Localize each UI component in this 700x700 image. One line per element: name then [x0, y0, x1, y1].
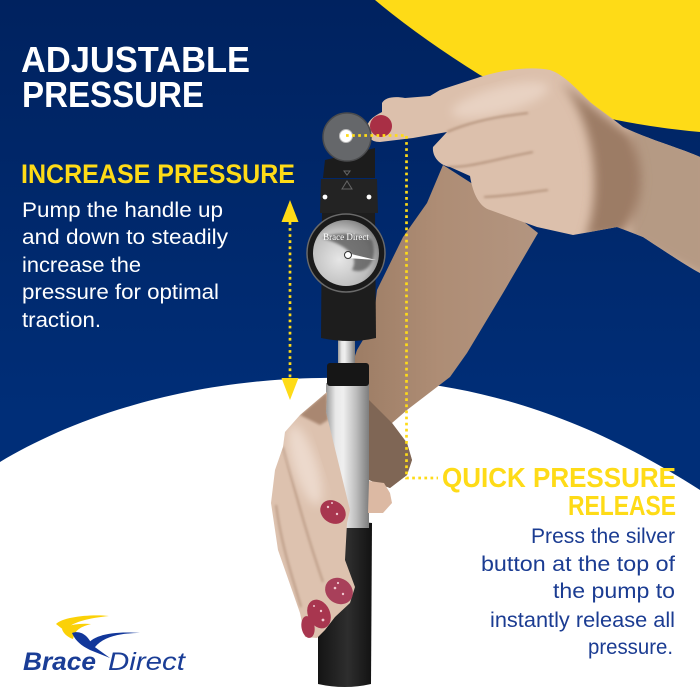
double arrow [282, 200, 298, 400]
forearm [340, 165, 538, 488]
side studs [323, 195, 371, 199]
release button [340, 130, 352, 142]
heading: quick pressure release [442, 462, 676, 521]
fingernails [300, 115, 392, 639]
hand back shadow [560, 80, 641, 238]
logo: Brace Direct [23, 615, 186, 676]
dial mottling [322, 234, 374, 271]
logo wordmark: Brace [23, 648, 96, 676]
dotted release leader [346, 136, 438, 478]
silver tube [326, 383, 369, 528]
knuckle shading [300, 392, 328, 425]
text: increase pressure instructions: traction. [22, 309, 101, 332]
pump upper body [320, 179, 378, 213]
yellow corner shape [375, 0, 700, 132]
nail glitter [313, 502, 344, 621]
gauge label: Brace Direct [323, 232, 369, 242]
pump [307, 113, 385, 687]
lower hand [271, 392, 355, 638]
needle [347, 253, 376, 260]
wrist and arm tone [630, 120, 700, 280]
text: quick release instructions: button at the top of [481, 553, 675, 576]
logo swooshes [56, 615, 109, 631]
text: quick release instructions: pressure. [588, 636, 673, 659]
logo: Brace Direct: Direct [108, 648, 186, 676]
finger highlights [452, 80, 548, 120]
white lower shape [0, 378, 700, 700]
gauge [307, 214, 385, 292]
title [21, 39, 250, 115]
text: quick release instructions: instantly release all [490, 609, 675, 632]
text: increase pressure instructions: pressure for optimal [22, 281, 219, 304]
upper hand [360, 60, 700, 280]
heading: increase pressure: INCREASE PRESSURE [21, 159, 295, 189]
finger highlights [284, 424, 325, 506]
finger creases [447, 113, 548, 197]
title: PRESSURE [22, 74, 204, 115]
text: quick release instructions: Press the silver [531, 525, 675, 548]
heading: quick pressure release: QUICK PRESSURE [442, 462, 676, 493]
rod [338, 340, 355, 365]
pump lower body [321, 213, 376, 341]
triangle marks [342, 171, 352, 189]
pump neck [323, 148, 375, 178]
heading: quick pressure release: RELEASE [568, 490, 676, 521]
text: quick release instructions: the pump to [553, 580, 675, 603]
pump grip [318, 522, 372, 687]
text: increase pressure instructions [22, 199, 229, 332]
finger separation [276, 447, 323, 607]
collar [327, 363, 369, 386]
knob [323, 113, 371, 161]
wrist base shadow [369, 400, 412, 488]
title: ADJUSTABLE [21, 39, 250, 80]
thumb [368, 481, 392, 513]
text: increase pressure instructions: increase the [22, 254, 141, 277]
text: increase pressure instructions: and down to steadily [22, 226, 229, 249]
text: increase pressure instructions: Pump the handle up [22, 199, 223, 222]
text: quick release instructions [481, 525, 675, 659]
